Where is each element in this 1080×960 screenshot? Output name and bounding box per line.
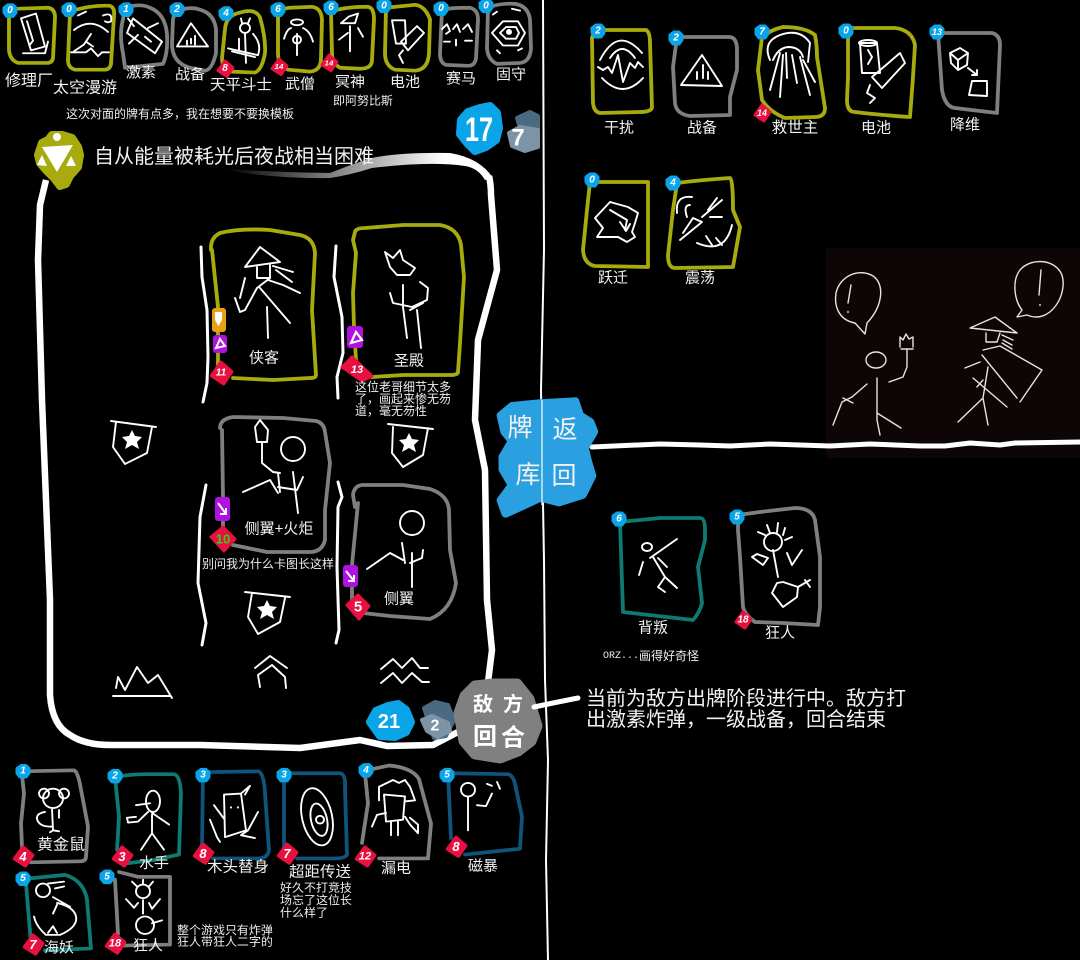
text: turn status: 出激素炸弹，一级战备，回合结束 (586, 708, 886, 731)
badge: enemy turn: 方 (503, 692, 523, 716)
card: 水手: 2 (111, 771, 118, 782)
card: 激素: 1 (123, 4, 129, 15)
card: 海妖: 海妖 (44, 940, 74, 956)
card: 太空漫游 (53, 4, 117, 96)
card: 狂人: 5 (104, 871, 110, 882)
card: 太空漫游: 太空漫游 (53, 79, 117, 96)
card: 修理厂: 0 (7, 5, 13, 16)
card: 木头替身 (195, 769, 269, 875)
card: 跃迁: 0 (589, 174, 595, 186)
card: 侧翼+火炬: 10 (216, 532, 230, 546)
icon: empty lane shield left (111, 421, 156, 464)
caption: 别问我为什么卡图长这样 (202, 556, 334, 571)
photo panel: stick figures meeting (826, 248, 1080, 458)
caption: 好久不打竞技 (280, 881, 352, 894)
card: 背叛: 6 (616, 514, 622, 524)
card: 侧翼: 5 (354, 598, 362, 616)
emblem: night marker (37, 133, 80, 186)
card: 降维 (931, 26, 1000, 134)
card: 天平斗士: 天平斗士 (210, 77, 272, 94)
card: 固守: 固守 (496, 67, 526, 83)
card: 战备 (670, 32, 737, 136)
card: 超距传送: 7 (283, 846, 292, 861)
card: 赛马: 赛马 (446, 71, 476, 87)
card: 海妖 (17, 873, 91, 956)
card: 电池 (378, 0, 430, 91)
card: 水手: 水手 (139, 855, 169, 872)
note: template remark: 这次对面的牌有点多，我在想要不要换模板 (66, 106, 294, 121)
card: 侠客 (211, 229, 316, 383)
card: 圣殿: 13 (351, 364, 363, 376)
heading: 自从能量被耗光后夜战相当困难 (94, 145, 374, 168)
badge: return to deck: 回 (551, 462, 577, 490)
card: 侠客: 侠客 (249, 350, 279, 366)
card: 狂人: 狂人 (765, 624, 795, 642)
caption: ORZ...画得好奇怪 (603, 648, 699, 663)
card: 漏电: 12 (359, 851, 371, 862)
card: 冥神: 14 (325, 58, 334, 67)
lane bracket (201, 247, 208, 402)
player side played cards (603, 508, 820, 663)
badge: return to deck (501, 400, 594, 513)
card: 太空漫游: 0 (66, 4, 72, 15)
card: 圣殿 (342, 225, 464, 418)
arrow: turn status connector (534, 698, 578, 707)
card: 侧翼+火炬 (202, 417, 334, 571)
battlefield frame (38, 153, 497, 748)
card: 磁暴 (441, 769, 522, 875)
speech bubble right (1015, 262, 1063, 317)
card: 跃迁 (583, 174, 648, 286)
card: 冥神: 冥神 (335, 74, 365, 91)
lane bracket (336, 482, 342, 643)
discard counter 7: 7 (511, 124, 525, 152)
card: 海妖: 5 (20, 873, 26, 884)
badge: enemy turn: 敌 (473, 693, 493, 716)
card: 战备: 2 (672, 32, 679, 44)
card: 激素 (120, 4, 167, 81)
card: 干扰: 干扰 (604, 120, 634, 136)
card: 超距传送: 超距传送 (289, 864, 351, 880)
icon: shield upper right (388, 424, 433, 467)
card: 狂人: 18 (109, 938, 121, 950)
card: 侧翼: 侧翼 (384, 590, 414, 608)
card: 黄金鼠: 4 (18, 849, 27, 864)
card: 侧翼+火炬: 侧翼+火炬 (245, 520, 313, 538)
counter: player deck 21 (370, 704, 411, 737)
badge: enemy turn: 合 (501, 724, 525, 752)
text: turn status: 当前为敌方出牌阶段进行中。敌方打 (586, 687, 906, 710)
card: 水手: 3 (118, 849, 126, 864)
card: 干扰 (592, 25, 652, 136)
card: 赛马: 0 (438, 3, 444, 14)
hand row: enemy cards top (4, 0, 531, 108)
caption: 什么样了 (280, 906, 328, 920)
card: 冥神: 6 (328, 2, 334, 13)
card: 修理厂: 修理厂 (5, 72, 53, 90)
icon: terrain waves (381, 658, 429, 683)
card: 救世主 (755, 26, 825, 136)
card: 武僧 (272, 4, 322, 93)
caption: 了，画起来惨无芴 (355, 391, 451, 406)
card: 冥神 (322, 2, 393, 108)
caption: 整个游戏只有炸弹 (177, 923, 273, 937)
counter: player deck 21: 21 (378, 711, 400, 733)
card: 救世主: 14 (757, 108, 767, 118)
card: 电池: 0 (843, 26, 849, 36)
card: 震荡: 震荡 (685, 270, 715, 286)
card: 电池: 电池 (861, 120, 891, 136)
card: 战备 (171, 4, 216, 83)
card: 干扰: 2 (594, 26, 601, 36)
card: 超距传送 (278, 769, 352, 920)
card: 修理厂 (4, 5, 55, 90)
badge: return to deck: 返 (552, 416, 578, 444)
caption (280, 881, 352, 920)
card: 武僧: 武僧 (285, 76, 315, 93)
counter: player discard 2 (422, 702, 454, 738)
badge: enemy turn: 回 (473, 724, 497, 750)
caption (177, 923, 273, 949)
card: 跃迁: 跃迁 (598, 270, 628, 286)
card: 狂人: 5 (734, 512, 740, 522)
return to deck divider line (592, 442, 1080, 447)
card: 电池: 电池 (390, 74, 420, 91)
center divider (541, 0, 548, 960)
card: 天平斗士: 4 (222, 8, 229, 19)
card: 赛马 (435, 3, 478, 87)
deck counter 17 (460, 106, 499, 151)
card: 木头替身: 木头替身 (207, 859, 269, 875)
icon: terrain chevron (255, 656, 287, 688)
caption: 这位老哥细节太多 (355, 379, 451, 394)
card: 降维: 13 (932, 27, 942, 37)
card: 海妖: 7 (29, 937, 38, 952)
card: 漏电: 漏电 (381, 860, 411, 877)
card: 战备: 战备 (175, 67, 205, 83)
card: 狂人 (101, 871, 170, 954)
card: 磁暴: 5 (444, 770, 450, 781)
card: 漏电: 4 (362, 765, 369, 776)
card: 圣殿: 圣殿 (394, 352, 424, 370)
discard counter 7 (509, 112, 538, 152)
card: 固守: 0 (483, 0, 489, 11)
card: 震荡: 4 (669, 178, 676, 188)
card: 背叛: 背叛 (638, 620, 668, 636)
lane bracket (334, 246, 343, 398)
ronin figure (958, 317, 1042, 425)
card: 狂人: 狂人 (133, 938, 163, 954)
card: 救世主: 救世主 (772, 118, 818, 136)
card: 黄金鼠: 黄金鼠 (37, 836, 85, 853)
badge: enemy turn (459, 684, 537, 758)
text: turn status (586, 687, 906, 731)
card: 黄金鼠 (15, 765, 88, 866)
card: 降维: 降维 (950, 116, 980, 134)
deck counter 17: 17 (465, 111, 493, 149)
badge: return to deck: 库 (515, 461, 541, 489)
card: 固守 (480, 0, 531, 83)
card: 侧翼 (343, 485, 456, 619)
card: 木头替身: 8 (199, 846, 208, 861)
card: 磁暴: 8 (452, 839, 461, 854)
card: 战备: 2 (173, 4, 180, 15)
battlefield units (111, 225, 464, 698)
card: 漏电 (357, 765, 431, 877)
counter: player discard 2: 2 (431, 718, 440, 734)
caption: 道，毫无芴性 (355, 403, 427, 418)
card: 激素: 激素 (126, 65, 156, 81)
enemy field right (583, 25, 1000, 286)
player hand (15, 765, 522, 956)
caption: 场忘了这位长 (280, 893, 352, 907)
lane bracket (198, 485, 206, 645)
card: 磁暴: 磁暴 (468, 858, 498, 875)
card: 战备: 战备 (687, 120, 717, 136)
card: 狂人: 18 (737, 614, 749, 626)
card: 电池 (840, 25, 915, 136)
card: 超距传送: 3 (281, 770, 287, 781)
card: 天平斗士: 8 (222, 63, 228, 74)
card: 侠客: 11 (216, 368, 227, 378)
caption (355, 379, 451, 418)
card: 水手 (109, 770, 181, 872)
card: 震荡 (667, 177, 740, 286)
card: 电池: 0 (381, 0, 387, 11)
card: 武僧: 6 (275, 4, 281, 15)
card: 救世主: 7 (759, 26, 765, 38)
card: 武僧: 14 (275, 62, 284, 71)
card: 狂人 (731, 508, 820, 642)
caption: 狂人带狂人二字的 (177, 935, 273, 949)
speech bubble left (836, 273, 881, 334)
card: 木头替身: 3 (200, 770, 206, 781)
badge: return to deck: 牌 (507, 414, 533, 442)
card: 背叛 (603, 513, 705, 663)
card: 冥神: 即阿努比斯 (333, 94, 393, 108)
figure with torch (833, 334, 913, 435)
icon: terrain mountain (113, 667, 172, 698)
card: 黄金鼠: 1 (20, 766, 26, 777)
icon: shield center (245, 592, 290, 634)
card: 天平斗士 (210, 8, 272, 94)
